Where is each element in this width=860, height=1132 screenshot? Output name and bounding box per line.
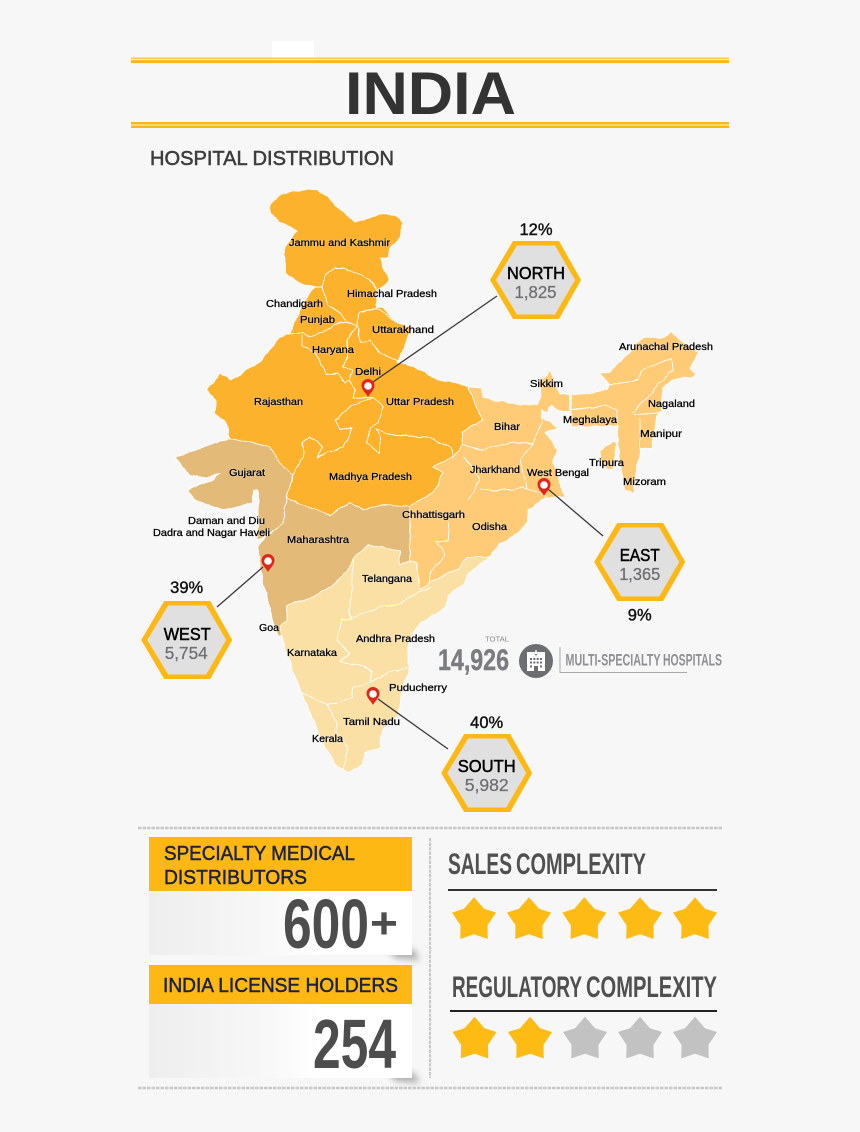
state labels: Kerala [312, 733, 343, 745]
region: east [410, 332, 698, 590]
hexagon: south [441, 714, 532, 812]
panel heading: DISTRIBUTORS [164, 866, 307, 889]
hexagon: east [594, 523, 685, 624]
state labels: Rajasthan [254, 396, 303, 408]
state labels: Goa [259, 622, 279, 634]
state labels: Chandigarh [266, 298, 323, 310]
panel heading [164, 842, 355, 889]
hexagon: east: 9% [628, 606, 652, 624]
state labels: Odisha [472, 521, 507, 533]
state labels: Dadra and Nagar Haveli [153, 527, 270, 539]
hexagon: south: 40% [470, 714, 504, 732]
hospitals caption: MULTI-SPECIALTY [566, 652, 660, 670]
leader lines [217, 296, 603, 749]
state labels: Manipur [640, 428, 683, 440]
heading: COMPLEXITY [516, 848, 646, 881]
state labels: Maharashtra [287, 534, 349, 546]
state labels: Delhi [355, 366, 381, 378]
hexagon: north: NORTH [507, 263, 565, 283]
heading [448, 848, 646, 881]
hexagon: west [141, 579, 232, 679]
state labels: Meghalaya [563, 414, 617, 426]
value: 254 [313, 1005, 396, 1083]
state labels: Karnataka [287, 647, 337, 659]
state labels: Uttarakhand [372, 324, 434, 336]
star rating 2 of 5 [452, 1017, 717, 1058]
state labels: Andhra Pradesh [356, 633, 435, 645]
state labels: Madhya Pradesh [329, 471, 412, 483]
state labels: Bihar [494, 421, 521, 433]
hospitals caption: HOSPITALS [663, 652, 722, 670]
state labels: Telangana [362, 573, 412, 585]
map pins [262, 379, 550, 705]
hexagon: north: 12% [519, 221, 553, 239]
total hospitals [438, 634, 722, 678]
title: INDIA [345, 60, 516, 127]
region: north [207, 189, 483, 515]
state labels: Chhattisgarh [402, 509, 465, 521]
panel: specialty medical distributors [149, 837, 420, 963]
state labels: Uttar Pradesh [386, 396, 454, 408]
total label: TOTAL [485, 634, 509, 644]
panel: sales complexity [448, 848, 717, 939]
value: 600 [283, 885, 369, 963]
state labels: Daman and Diu [188, 515, 265, 527]
panel: India license holders [149, 965, 420, 1083]
total number: 14,926 [438, 644, 509, 677]
bracket rule [560, 647, 687, 672]
hexagon: west: 39% [170, 579, 204, 597]
state labels: Jharkhand [470, 464, 520, 476]
state labels: Gujarat [229, 467, 265, 479]
dividers [138, 828, 722, 1088]
star rating 5 of 5 [452, 897, 717, 939]
header rule top [131, 58, 729, 63]
heading: COMPLEXITY [586, 971, 717, 1004]
hexagon: south: 5,982 [465, 775, 509, 795]
hexagon: west: 5,754 [165, 643, 208, 663]
hexagon: north: 1,825 [514, 282, 556, 302]
hexagon: west: WEST [164, 624, 211, 644]
hexagon: east: 1,365 [619, 564, 660, 584]
state labels [153, 237, 713, 745]
state labels: Puducherry [389, 682, 448, 694]
state labels: West Bengal [527, 467, 589, 479]
panel heading: INDIA LICENSE HOLDERS [163, 974, 398, 997]
state labels: Haryana [312, 344, 354, 356]
heading: hospital distribution: HOSPITAL DISTRIBUTION [150, 147, 394, 170]
hexagon: north [490, 221, 581, 319]
state labels: Sikkim [530, 378, 563, 390]
panel heading: SPECIALTY MEDICAL [164, 842, 355, 865]
state labels: Himachal Pradesh [347, 288, 437, 300]
heading: REGULATORY [452, 971, 582, 1004]
hexagon: south: SOUTH [458, 756, 516, 776]
hexagon: east: EAST [620, 545, 660, 565]
state labels: Mizoram [623, 476, 666, 488]
state labels: Tripura [589, 457, 624, 469]
heading: SALES [448, 848, 512, 881]
header rule bottom [131, 122, 729, 128]
state labels: Nagaland [648, 398, 695, 410]
region: west [175, 438, 410, 636]
value: + [370, 899, 398, 948]
state labels: Punjab [300, 314, 335, 326]
icon: hospital building [519, 644, 553, 678]
state labels: Jammu and Kashmir [289, 237, 391, 249]
state labels: Tamil Nadu [343, 716, 400, 728]
panel: regulatory complexity [450, 971, 717, 1058]
region: south [280, 545, 490, 773]
state labels: Arunachal Pradesh [619, 341, 713, 353]
map of India [153, 189, 713, 773]
